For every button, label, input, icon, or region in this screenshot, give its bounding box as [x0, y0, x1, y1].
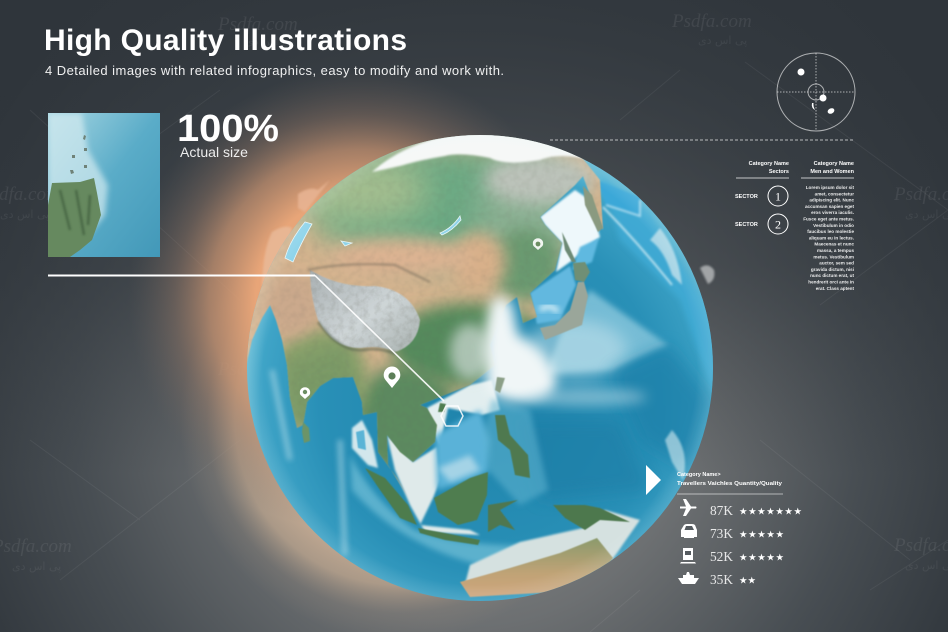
australia	[460, 538, 613, 597]
tibet plateau	[305, 264, 430, 357]
cloud wisps outside the globe	[262, 180, 714, 300]
men and women text column: massa, a tempus	[817, 248, 854, 253]
men and women text column: gravida dictum, nisi	[811, 267, 854, 272]
men and women text column: eros viverra iaculis.	[811, 210, 854, 215]
watermarks: پی اس دی	[245, 35, 294, 48]
globe rim highlight	[240, 130, 720, 610]
vehicles row: train 52K: ★★★★★	[739, 552, 784, 564]
watermarks: پی اس دی	[698, 34, 747, 47]
vehicles row: car 73K: ★★★★★	[739, 530, 784, 540]
vehicles row: train 52K	[680, 548, 784, 565]
vehicles heading: Category Name>	[677, 472, 721, 478]
men and women text column: adipiscing elit. Nunc	[809, 198, 854, 203]
orange glow behind globe	[128, 68, 620, 632]
men and women text column: Maecenas et nunc	[814, 242, 854, 247]
men and women text column: accumsan sapien eget	[805, 204, 854, 209]
men and women text column: Men and Women	[810, 169, 855, 175]
inset map: actual size	[48, 113, 160, 257]
map pin: small north	[533, 238, 543, 250]
cloud over east china sea	[450, 297, 647, 406]
japan and sakhalin	[540, 186, 603, 340]
watermarks: پی اس دی	[0, 208, 49, 221]
men and women text column: nunc dictum erat, ut	[810, 273, 854, 278]
vehicles heading: Travellers Vaichles Quantity/Quality	[677, 481, 783, 487]
title: High Quality illustrations	[44, 24, 407, 57]
men and women text column: hendrerit orci ante in	[808, 280, 854, 284]
dashed leader line	[550, 139, 855, 141]
vehicles row: train 52K: 52K	[710, 550, 733, 565]
radar chart	[777, 53, 855, 131]
watermarks: Psdfa.com	[671, 11, 752, 32]
men and women text column: erat. Class aptent	[816, 286, 854, 291]
vehicles row: car 73K	[681, 524, 784, 542]
men and women text column: metus. Vestibulum	[813, 254, 854, 259]
men and women text column: Fusce eget ante metus.	[803, 216, 854, 222]
sectors table column	[735, 161, 789, 234]
100% figure: Actual size	[180, 144, 248, 160]
men and women text column: amet, consectetur	[815, 191, 854, 196]
asia landmass	[247, 135, 604, 492]
vehicles heading	[677, 472, 783, 494]
map pin: large	[384, 367, 400, 388]
sectors table column: Sectors	[769, 169, 789, 175]
globe	[240, 120, 720, 610]
vehicles row: car 73K: 73K	[710, 527, 733, 542]
vehicles row: ship 35K: 35K	[710, 573, 733, 588]
men and women text column: Lorem ipsum dolor sit	[806, 185, 854, 190]
sectors table column: SECTOR	[735, 222, 758, 228]
sectors table column: 1	[775, 190, 781, 204]
men and women text column: Vestibulum in odio	[813, 223, 854, 228]
pale ocean shelves and cloud bands	[272, 175, 715, 584]
ocean	[240, 130, 720, 610]
watermarks: پی اس دی	[12, 560, 61, 573]
sectors table column: 2	[775, 218, 781, 232]
caspian and lake baikal	[285, 216, 461, 262]
subtitle: 4 Detailed images with related infographics, easy to modify and work with.	[45, 63, 504, 78]
southeast asia islands	[302, 377, 630, 545]
vehicles row: plane 87K	[680, 499, 802, 519]
watermarks: Psdfa.com	[217, 14, 298, 35]
arctic snow	[372, 135, 584, 173]
sectors table column: Category Name	[749, 161, 789, 167]
watermarks: Psdfa.com	[217, 359, 298, 380]
men and women text column: Category Name	[814, 161, 854, 167]
callout line with hexagon marker	[48, 276, 463, 426]
map pin: small india	[300, 387, 310, 399]
vehicles row: plane 87K: ★★★★★★★	[739, 506, 802, 518]
100% figure: 100%	[177, 108, 279, 150]
men and women text column	[801, 161, 855, 291]
vehicles row: ship 35K	[678, 572, 756, 588]
vehicles row: ship 35K: ★★	[739, 576, 756, 586]
men and women text column: aliquam eu in lectus.	[809, 235, 854, 240]
sectors table column: SECTOR	[735, 194, 758, 200]
play triangle marker	[646, 465, 661, 495]
men and women text column: auctor, sem sed	[819, 261, 854, 266]
vehicles row: plane 87K: 87K	[710, 504, 733, 519]
men and women text column: faucibus leo molestie	[807, 229, 854, 234]
